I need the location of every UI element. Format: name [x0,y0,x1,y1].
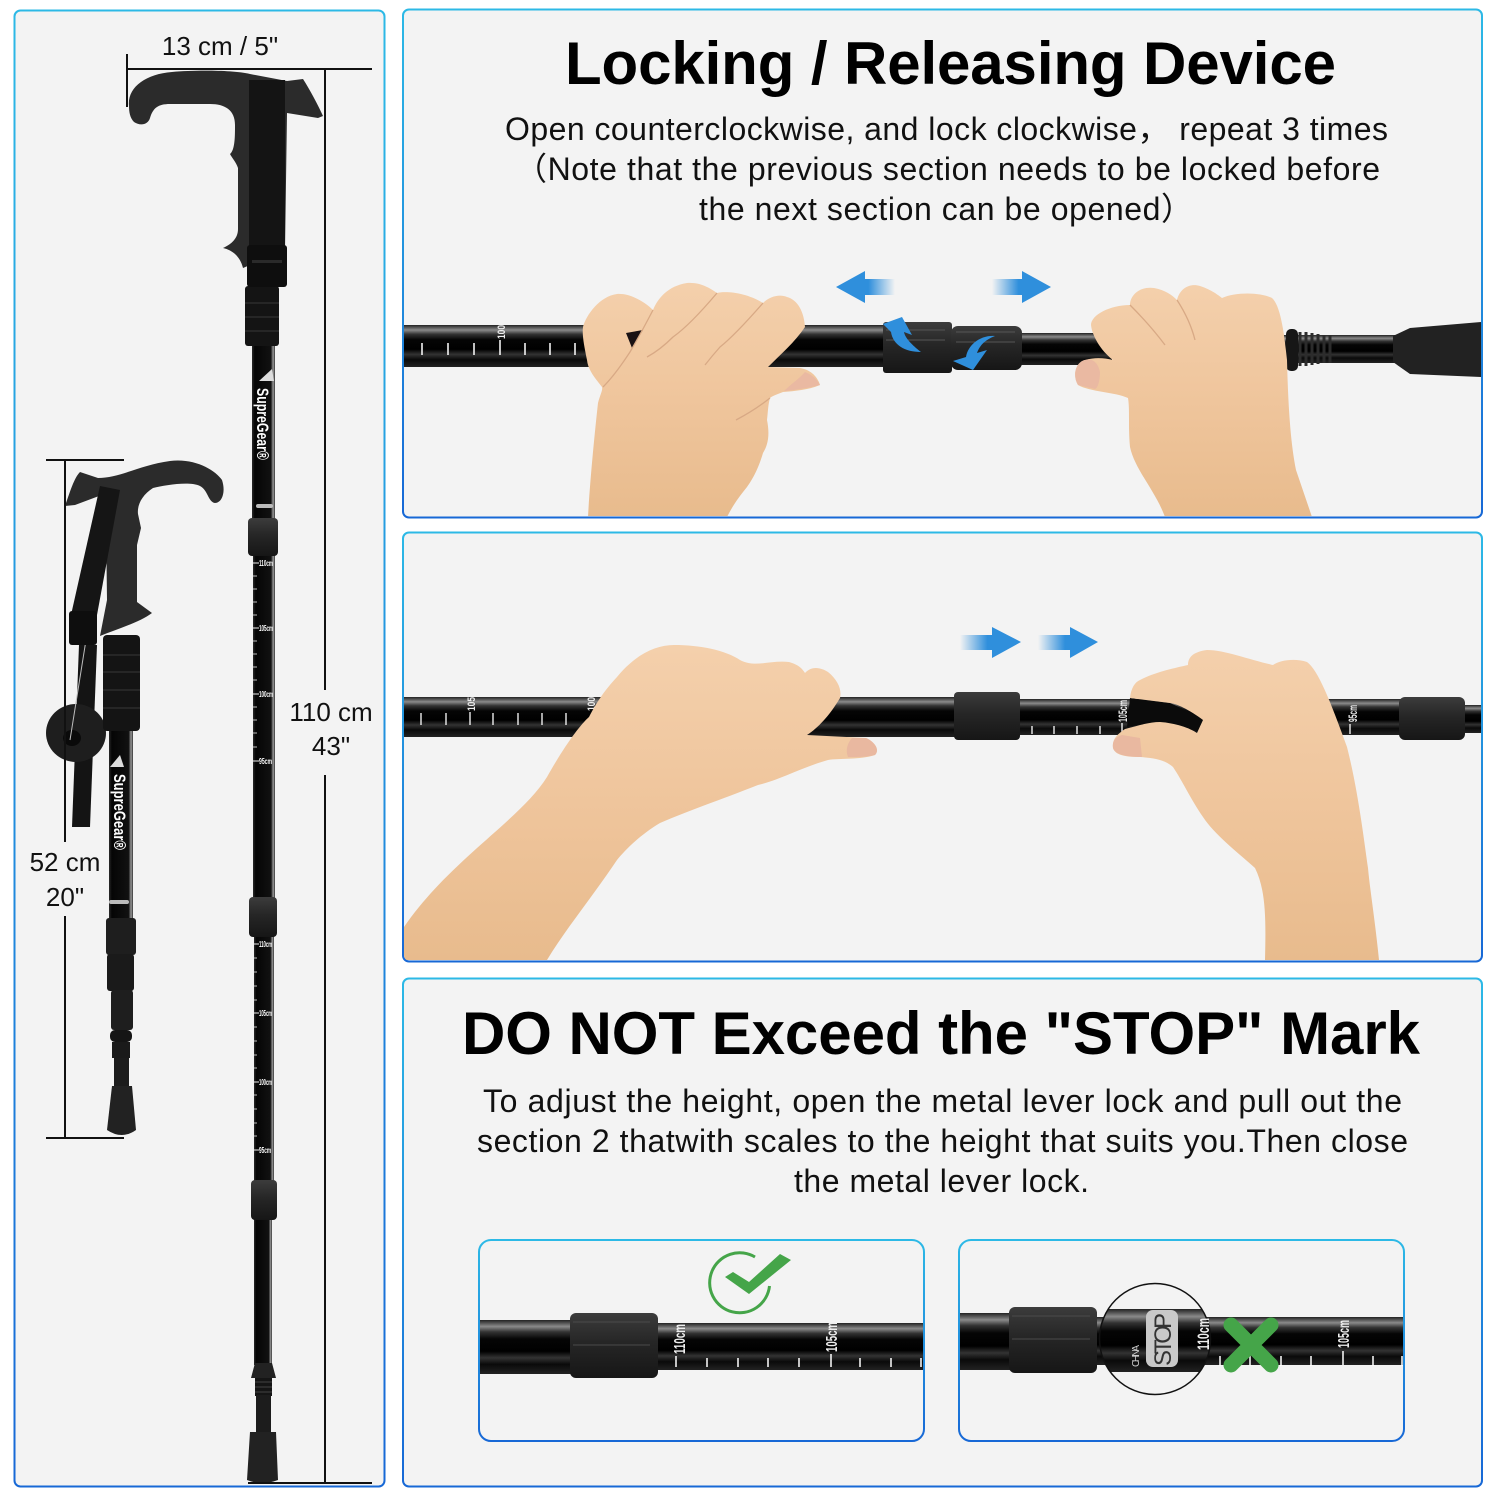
adjustment instructions: the metal lever lock. [794,1163,1089,1199]
icon: green cross [1231,1325,1271,1365]
icon: green check [710,1253,791,1313]
stop mark circle: STOP [1150,1313,1177,1366]
folded pole strap [69,486,120,645]
pole extended: 105cm [1116,700,1130,722]
tall pole handle [129,71,323,268]
tall pole scale: 95cm [259,757,272,766]
folded pole basket [46,640,106,762]
tall pole scale: 110cm [259,940,272,949]
pole with locks: 100 [496,325,508,339]
arrow: rotate right collar [953,336,995,370]
arrow: pull right [992,271,1051,303]
tall pole scale: 100cm [259,1078,272,1087]
dimension: 110 cm / 43": 110 cm [289,697,373,727]
correct pole [480,1313,924,1378]
tall pole scale [253,559,273,1155]
stop mark circle: CHINA [1131,1345,1142,1367]
tall pole 110 cm [129,71,323,1483]
arrow: rotate left collar [883,317,921,352]
folded pole handle [65,461,224,636]
panel: pulling the pole apart [403,532,1482,962]
panel: do not exceed the stop mark [403,978,1482,1486]
panel: correct position [479,1240,924,1441]
dimension: 52 cm / 20" [30,460,124,1138]
heading: stop mark: DO NOT Exceed the "STOP" Mark [462,1000,1421,1067]
adjustment instructions: To adjust the height, open the metal lever lock and pull out the [483,1083,1402,1119]
tall pole scale: 105cm [259,1009,272,1018]
pole extended: 95cm [1346,705,1360,722]
left arm [404,645,877,960]
panel: incorrect position [959,1240,1404,1441]
instruction text: （Note that the previous section needs to be locked before [515,151,1380,187]
folded pole foam grip [103,635,140,731]
folded pole logo [109,755,129,904]
incorrect pole [960,1307,1404,1373]
tall pole scale: 95cm [259,1146,271,1155]
correct pole: 110cm [672,1324,689,1354]
pole with locks [404,322,1481,377]
adjustment instructions [477,1083,1408,1199]
stop mark circle: 110cm [1194,1318,1213,1350]
instruction text: Open counterclockwise, and lock clockwise， repeat 3 times [505,111,1388,147]
arrow: pull right 2 [1038,627,1098,658]
tall pole shaft [247,345,278,1483]
dimension: 110 cm / 43" [248,69,373,1483]
instruction text: the next section can be opened） [699,191,1193,227]
photo: twisting the lock [404,271,1481,517]
pole scale [1220,1320,1402,1366]
pole scale: 105cm [1336,1320,1353,1348]
tall pole logo: SupreGear® [253,388,272,460]
panel: locking and releasing device [403,10,1482,518]
panel: pole dimensions [14,10,384,1486]
right arm [1113,650,1379,960]
dimension: 110 cm / 43": 43" [312,731,350,761]
folded pole 52 cm [46,461,224,1135]
arrow: pull left [836,271,895,303]
dimension: 13 cm / 5" [127,31,372,107]
correct pole: 105cm [824,1322,841,1352]
adjustment instructions: section 2 thatwith scales to the height that suits you.Then close [477,1123,1408,1159]
tall pole strap [247,80,287,287]
arrow: pull right 1 [960,627,1021,658]
instruction text [505,111,1388,227]
tall pole scale: 100cm [259,690,273,699]
folded pole strap tail [72,645,97,827]
right hand [1075,285,1312,517]
tall pole logo [253,369,274,508]
left hand [583,283,820,517]
stop mark circle [1098,1284,1213,1394]
pole extended: 105 [466,697,478,711]
dimension: 52 cm / 20": 20" [46,882,84,912]
pole extended [404,692,1482,740]
tall pole scale: 110cm [259,559,273,568]
pole extended: 100 [586,697,598,711]
tall pole grip foam [245,286,279,346]
dimension: 52 cm / 20": 52 cm [30,847,100,877]
folded pole shaft [106,730,136,1135]
heading: locking device: Locking / Releasing Device [565,30,1336,97]
dimension: 13 cm / 5": 13 cm / 5" [162,31,278,61]
tall pole scale: 105cm [259,624,273,633]
folded pole logo: SupreGear® [110,774,129,850]
